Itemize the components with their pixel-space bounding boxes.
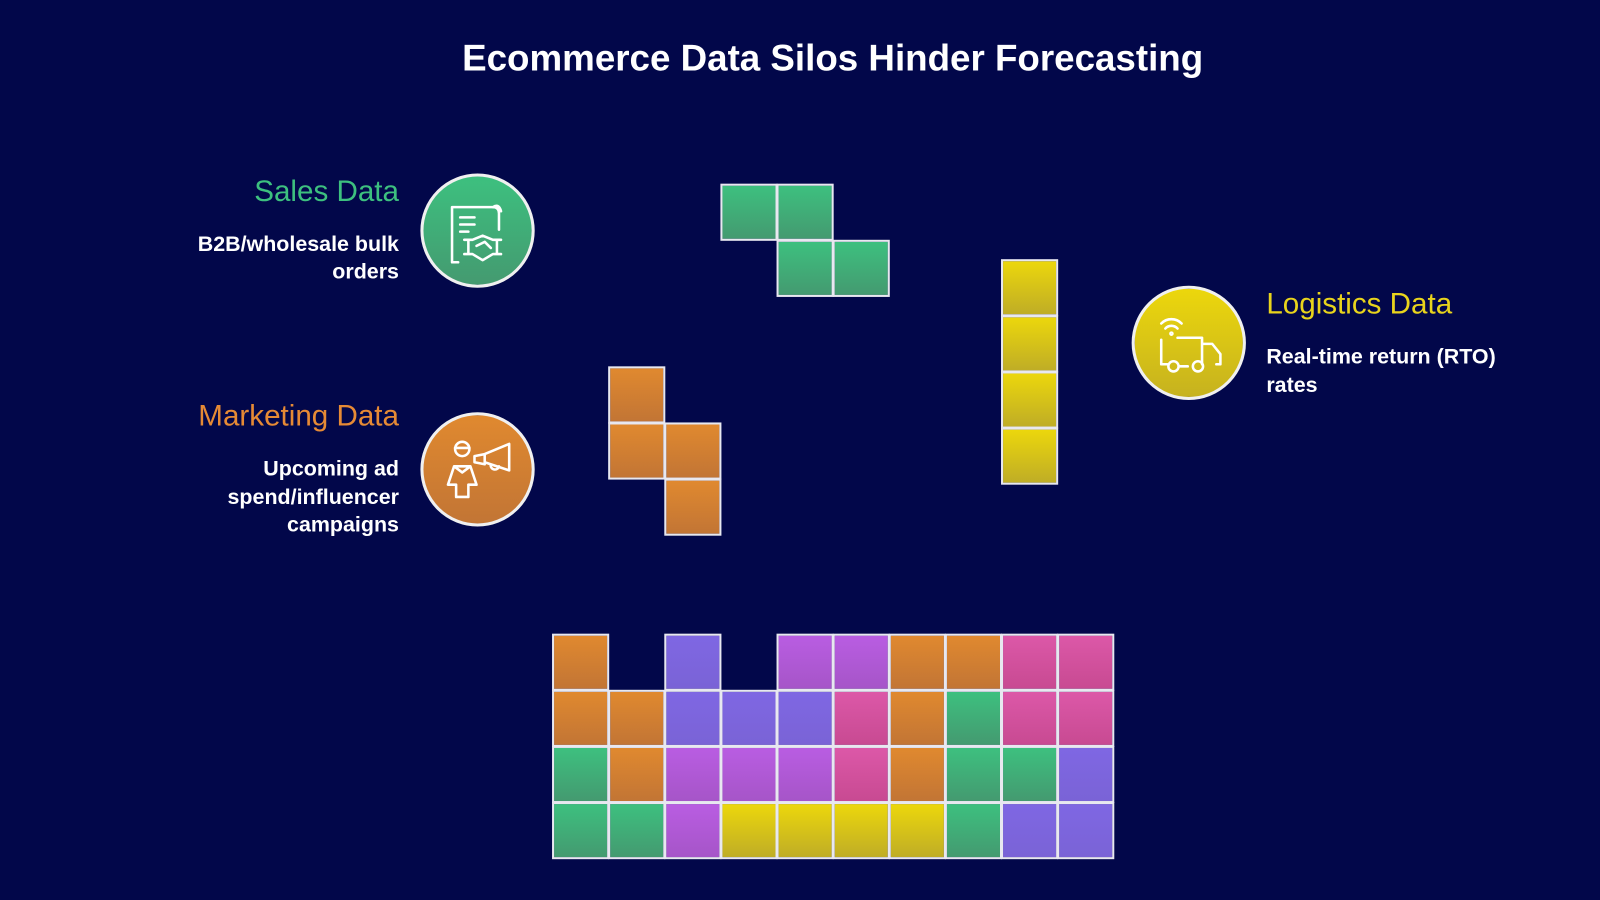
logistics description: Real-time return (RTO): [1266, 345, 1496, 368]
marketing description: [228, 457, 399, 537]
icon: marketing megaphone person: [420, 412, 535, 527]
logistics title: Logistics Data: [1266, 288, 1452, 320]
green block piece: [720, 184, 890, 297]
marketing description: campaigns: [287, 513, 399, 537]
marketing description: Upcoming ad: [263, 457, 399, 481]
marketing title: Marketing Data: [198, 400, 399, 433]
icon: sales contract handshake: [420, 173, 535, 288]
sales description: B2B/wholesale bulk: [198, 233, 399, 256]
yellow block piece: [1001, 259, 1058, 485]
logistics description: rates: [1266, 373, 1318, 396]
sales description: orders: [332, 260, 399, 284]
sales description: [198, 233, 399, 284]
marketing description: spend/influencer: [228, 485, 399, 509]
combined data grid: [552, 634, 1114, 860]
logistics description: [1266, 345, 1496, 396]
icon: logistics truck: [1132, 286, 1246, 400]
orange block piece: [608, 366, 722, 536]
sales title: Sales Data: [254, 176, 399, 208]
title: Ecommerce Data Silos Hinder Forecasting: [462, 37, 1203, 79]
